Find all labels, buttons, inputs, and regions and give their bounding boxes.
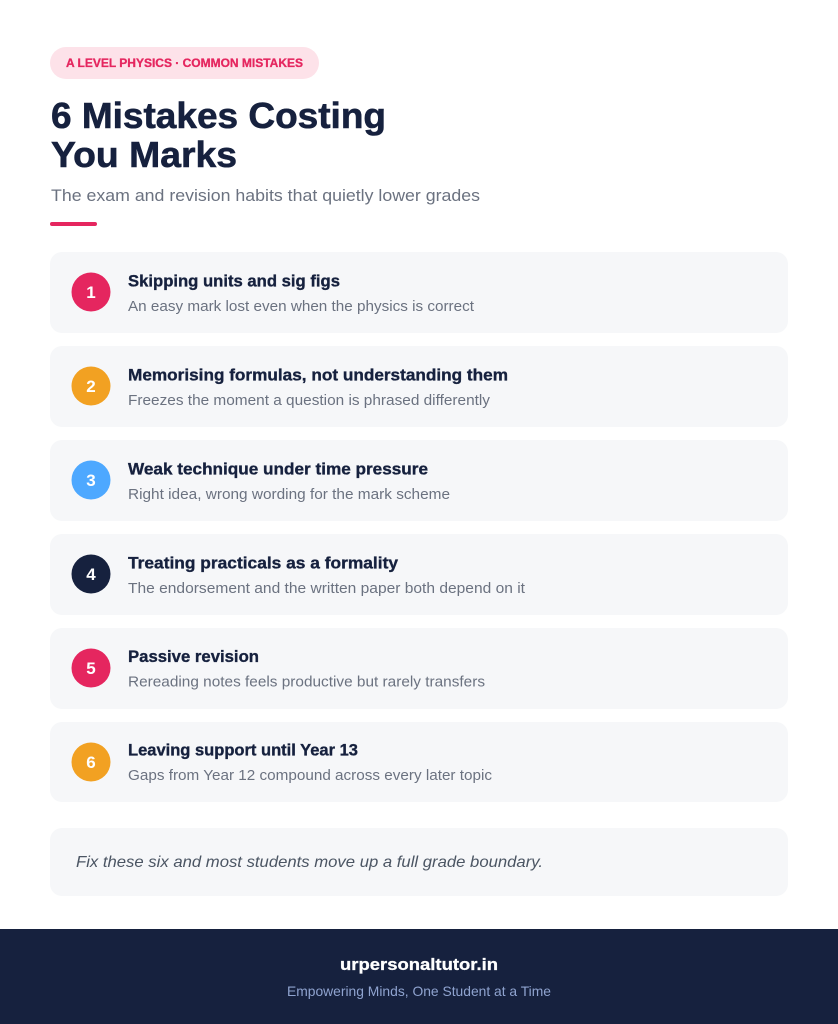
icon: number 3: 3 bbox=[86, 471, 96, 490]
callout: Fix these six and most students move up a full grade boundary. bbox=[76, 854, 543, 871]
accent rule bbox=[50, 222, 97, 226]
icon: number 5 bbox=[72, 648, 110, 688]
icon: number 4 bbox=[72, 554, 110, 594]
mistake 4 heading: Treating practicals as a formality bbox=[128, 554, 399, 572]
icon: number 4: 4 bbox=[86, 565, 96, 584]
callout bbox=[50, 828, 788, 896]
mistake 5 description: Rereading notes feels productive but rarely transfers bbox=[128, 674, 485, 690]
subtitle: The exam and revision habits that quietly lower grades bbox=[51, 186, 480, 205]
icon: number 6: 6 bbox=[86, 753, 96, 772]
mistake 6 heading: Leaving support until Year 13 bbox=[128, 740, 358, 760]
footer site name: urpersonaltutor.in bbox=[340, 955, 498, 974]
mistake 6 description: Gaps from Year 12 compound across every later topic bbox=[128, 767, 493, 784]
icon: number 3 bbox=[72, 460, 110, 500]
panel: mistake 1 bbox=[50, 252, 788, 333]
mistake 1 description: An easy mark lost even when the physics is correct bbox=[128, 298, 475, 315]
mistake 5 heading: Passive revision bbox=[128, 647, 259, 666]
icon: number 6 bbox=[72, 742, 110, 782]
panel: mistake 6 bbox=[50, 722, 788, 802]
title: You Marks bbox=[51, 134, 237, 175]
panel: mistake 2 bbox=[50, 346, 788, 427]
mistake 3 heading: Weak technique under time pressure bbox=[128, 460, 428, 478]
panel: mistake 5 bbox=[50, 628, 788, 709]
icon: number 1 bbox=[72, 272, 110, 312]
panel: mistake 4 bbox=[50, 534, 788, 615]
mistake 4 description: The endorsement and the written paper both depend on it bbox=[128, 580, 526, 597]
footer bbox=[0, 929, 838, 1024]
panel: mistake 3 bbox=[50, 440, 788, 521]
mistake 3 description: Right idea, wrong wording for the mark scheme bbox=[128, 486, 450, 503]
icon: number 2: 2 bbox=[86, 377, 96, 396]
icon: number 2 bbox=[72, 366, 110, 406]
title: 6 Mistakes Costing bbox=[51, 95, 386, 136]
badge: category pill bbox=[50, 47, 319, 79]
mistake 2 description: Freezes the moment a question is phrased differently bbox=[128, 392, 491, 409]
mistake 1 heading: Skipping units and sig figs bbox=[128, 272, 340, 290]
icon: number 5: 5 bbox=[86, 659, 96, 678]
footer tagline: Empowering Minds, One Student at a Time bbox=[287, 983, 551, 999]
icon: number 1: 1 bbox=[86, 283, 96, 302]
badge: category pill: A LEVEL PHYSICS · COMMON MISTAKES bbox=[66, 56, 303, 70]
mistake 2 heading: Memorising formulas, not understanding them bbox=[128, 366, 508, 384]
title bbox=[51, 95, 386, 175]
